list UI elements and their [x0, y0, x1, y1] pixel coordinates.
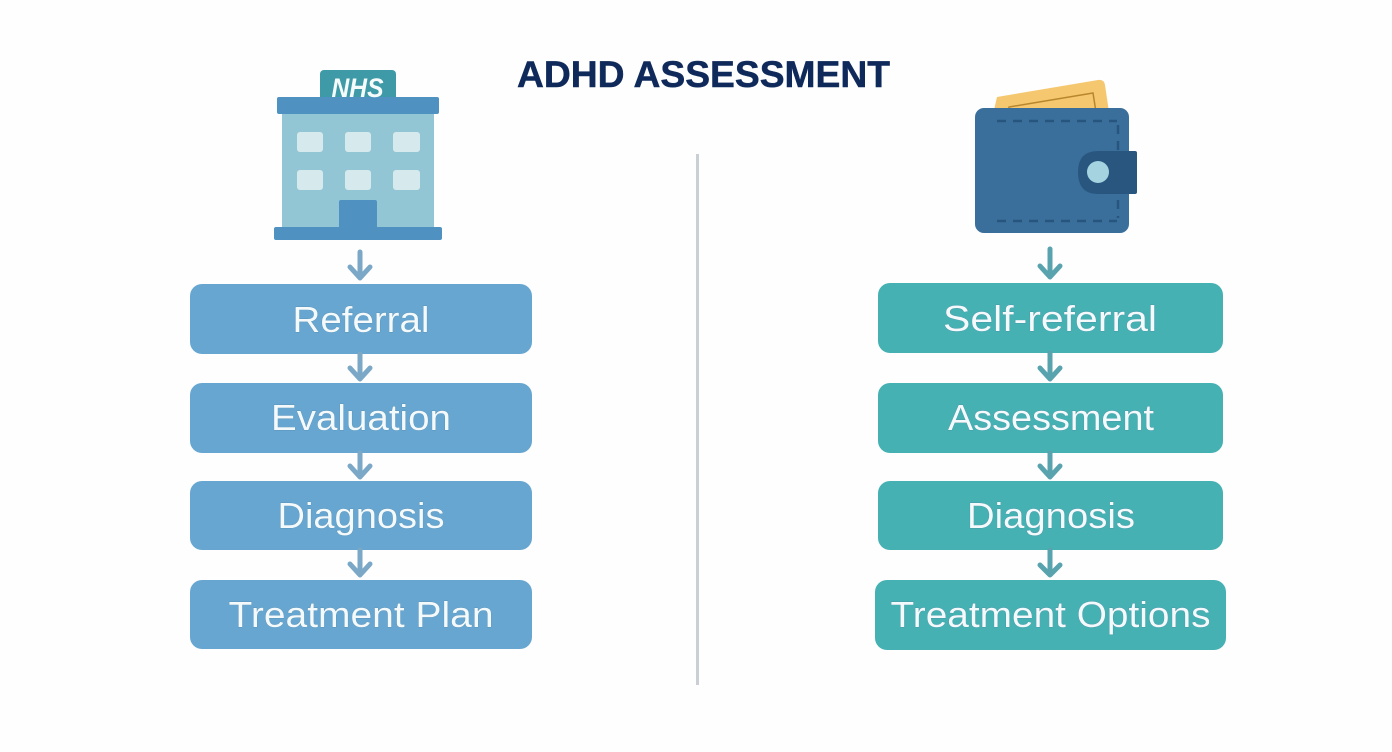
step: Assessment: Assessment — [948, 397, 1154, 438]
step: Treatment Options: Treatment Options — [890, 594, 1210, 635]
step: Self-referral: Self-referral — [943, 298, 1157, 339]
step: Referral — [190, 284, 532, 354]
arrow: diagnosis to treatment options — [1040, 550, 1060, 575]
arrow: diagnosis to treatment plan — [350, 550, 370, 575]
icon: NHS building: NHS — [332, 73, 384, 103]
step: Diagnosis (private): Diagnosis — [967, 495, 1135, 536]
title: ADHD ASSESSMENT — [517, 54, 890, 95]
step: Evaluation — [190, 383, 532, 453]
icon: wallet — [975, 80, 1137, 233]
arrow: referral to evaluation — [350, 354, 370, 379]
step: Diagnosis: Diagnosis — [278, 495, 444, 536]
step: Diagnosis (private) — [878, 481, 1223, 550]
step: Self-referral — [878, 283, 1223, 353]
step: Treatment Plan: Treatment Plan — [228, 594, 494, 635]
step: Referral: Referral — [292, 299, 430, 340]
step: Diagnosis — [190, 481, 532, 550]
step: Treatment Plan — [190, 580, 532, 649]
arrow: wallet to self-referral — [1040, 249, 1060, 277]
arrow: self-referral to assessment — [1040, 353, 1060, 379]
step: Treatment Options — [875, 580, 1226, 650]
arrow: evaluation to diagnosis — [350, 453, 370, 477]
arrow: building to referral — [350, 252, 370, 278]
step: Assessment — [878, 383, 1223, 453]
icon: NHS building — [274, 70, 442, 240]
arrow: assessment to diagnosis — [1040, 453, 1060, 477]
step: Evaluation: Evaluation — [271, 397, 451, 438]
